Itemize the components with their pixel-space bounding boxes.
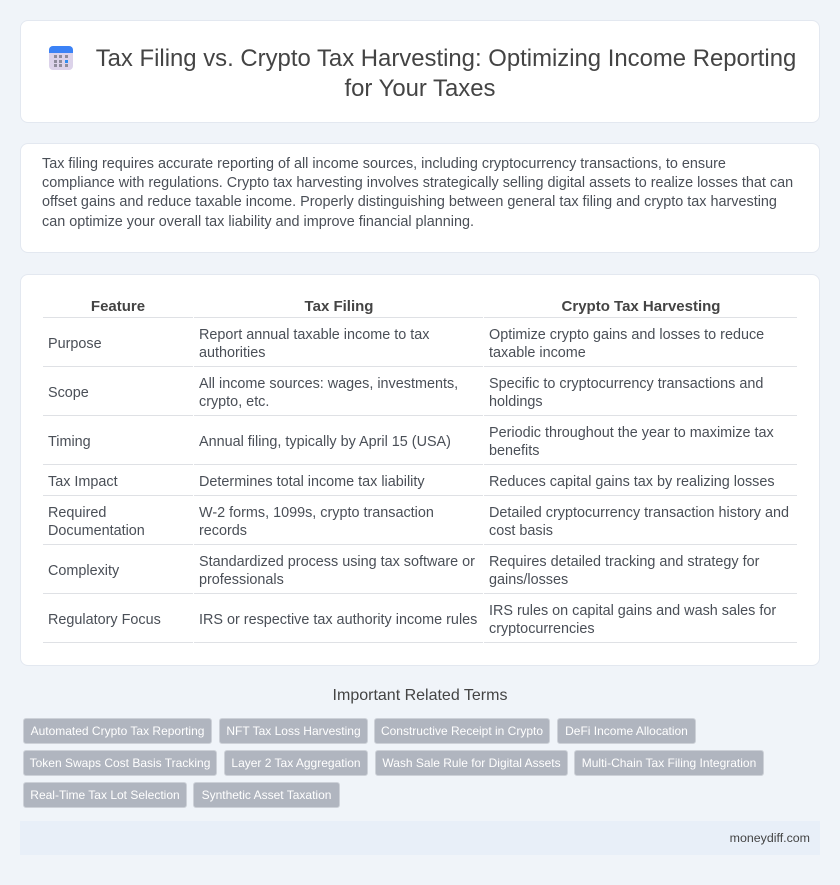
row: complexity: professionals	[199, 572, 284, 588]
footer	[20, 821, 820, 855]
row: regulatory focus: cryptocurrencies	[489, 621, 595, 637]
row: purpose: Purpose	[48, 336, 102, 352]
panel: related term tags: Constructive Receipt in Crypto	[381, 724, 543, 738]
text block: introduction	[42, 156, 793, 230]
row: regulatory focus: Regulatory Focus	[48, 612, 161, 628]
table header: Crypto Tax Harvesting	[562, 298, 720, 315]
table header	[91, 298, 720, 315]
panel: related term tags: Multi-Chain Tax Filing Integration	[582, 756, 756, 770]
row: timing: Timing	[48, 434, 91, 450]
row: complexity: Complexity	[48, 563, 119, 579]
row: tax impact	[48, 474, 775, 490]
row: timing: benefits	[489, 443, 539, 459]
row: purpose	[48, 327, 764, 361]
row: timing: Periodic throughout the year to maximize tax	[489, 425, 774, 441]
panel: related term tags: Layer 2 Tax Aggregation	[231, 756, 361, 770]
row: complexity: gains/losses	[489, 572, 568, 588]
text block: introduction: offset gains and reduce taxable income. Properly distinguishing between general tax filing and crypto tax harvesting	[42, 194, 777, 210]
row: tax impact: Determines total income tax liability	[199, 474, 425, 490]
row: timing	[48, 425, 774, 459]
row: required documentation: cost basis	[489, 523, 553, 539]
table header: Tax Filing	[305, 298, 373, 315]
row: scope: crypto, etc.	[199, 394, 269, 410]
row: scope: holdings	[489, 394, 543, 410]
row: timing: Annual filing, typically by April 15 (USA)	[199, 434, 451, 450]
text block: introduction: compliance with regulations. Crypto tax harvesting involves strategically selling digital assets to realize losses that can	[42, 175, 793, 191]
row: regulatory focus: IRS rules on capital gains and wash sales for	[489, 603, 776, 619]
title: for Your Taxes	[344, 75, 495, 102]
row: complexity: Requires detailed tracking and strategy for	[489, 554, 759, 570]
row: tax impact: Reduces capital gains tax by realizing losses	[489, 474, 775, 490]
row: tax impact: Tax Impact	[48, 474, 118, 490]
row: required documentation: W-2 forms, 1099s, crypto transaction	[199, 505, 434, 521]
panel: related term tags: Real-Time Tax Lot Selection	[30, 788, 180, 802]
row: purpose: Optimize crypto gains and losses to reduce	[489, 327, 764, 343]
panel: related term tags	[23, 718, 764, 808]
panel: related term tags: DeFi Income Allocation	[565, 724, 688, 738]
text block: introduction: can optimize your overall tax liability and improve financial planning.	[42, 214, 474, 230]
row: scope: All income sources: wages, investments,	[199, 376, 458, 392]
row: complexity	[48, 554, 760, 588]
panel: related term tags: Automated Crypto Tax Reporting	[31, 724, 204, 738]
panel: related term tags: Synthetic Asset Taxation	[202, 788, 331, 802]
table header: Feature	[91, 298, 145, 315]
text block: introduction: Tax filing requires accurate reporting of all income sources, including cryptocurrency transactions, to ensure	[42, 156, 726, 172]
panel: introduction	[20, 143, 820, 253]
title: Tax Filing vs. Crypto Tax Harvesting: Optimizing Income Reporting	[96, 45, 796, 72]
row: scope: Scope	[48, 385, 89, 401]
row: purpose: authorities	[199, 345, 265, 361]
row: regulatory focus	[48, 603, 776, 637]
row: scope: Specific to cryptocurrency transactions and	[489, 376, 763, 392]
panel: related term tags: NFT Tax Loss Harvesting	[226, 724, 361, 738]
icon: calendar	[49, 46, 73, 70]
row: required documentation: records	[199, 523, 247, 539]
row: required documentation: Required	[48, 505, 106, 521]
row: purpose: taxable income	[489, 345, 586, 361]
heading: important related terms: Important Related Terms	[333, 687, 507, 704]
panel: title card	[20, 20, 820, 123]
panel: related term tags: Token Swaps Cost Basis Tracking	[30, 756, 210, 770]
title	[96, 45, 796, 102]
row: required documentation: Detailed cryptocurrency transaction history and	[489, 505, 789, 521]
row: regulatory focus: IRS or respective tax authority income rules	[199, 612, 477, 628]
footer credit: moneydiff.com	[730, 831, 810, 845]
row: required documentation: Documentation	[48, 523, 145, 539]
row: complexity: Standardized process using tax software or	[199, 554, 475, 570]
row: purpose: Report annual taxable income to tax	[199, 327, 429, 343]
row: scope	[48, 376, 763, 410]
panel: comparison table	[20, 274, 820, 666]
panel: related term tags: Wash Sale Rule for Digital Assets	[382, 756, 561, 770]
row: required documentation	[48, 505, 789, 539]
